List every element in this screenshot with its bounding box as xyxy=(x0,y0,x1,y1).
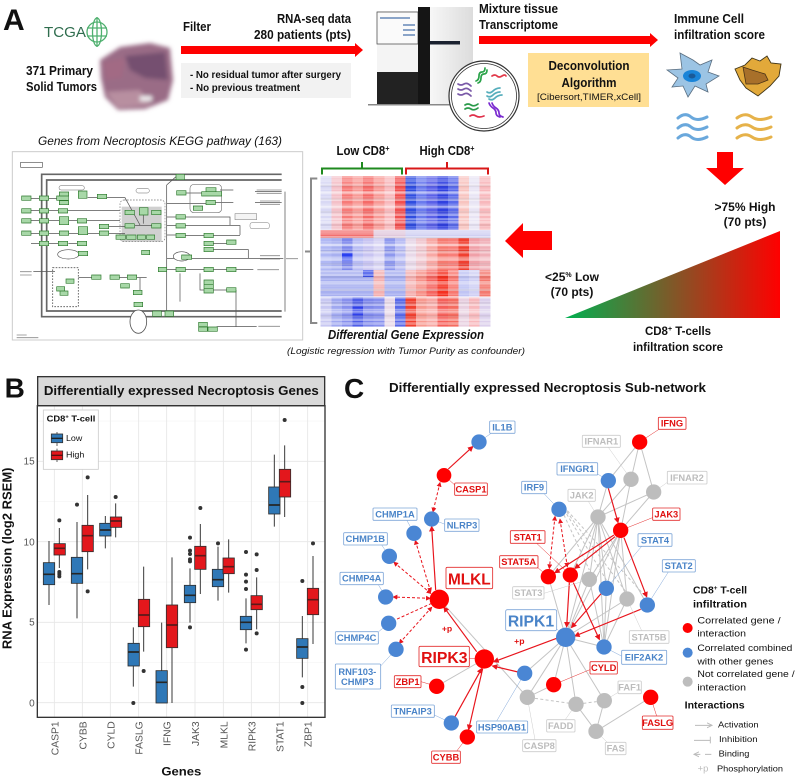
node: CYBB: CYBB xyxy=(433,752,459,762)
x axis gene labels: CASP1 xyxy=(50,721,61,755)
node: STAT4 xyxy=(599,534,672,596)
RNA-seq label: RNA-seq data xyxy=(277,12,352,26)
node: MLKL: MLKL xyxy=(448,572,491,589)
infiltration gradient triangle xyxy=(565,231,780,318)
legend item: correlated: Correlated gene / xyxy=(697,616,781,626)
tumor count label: 371 Primary xyxy=(26,64,93,78)
node: RIPK3: RIPK3 xyxy=(421,650,467,667)
legend: CD8 T-cell: + xyxy=(65,415,69,421)
legend heading: interactions: Interactions xyxy=(685,700,745,711)
phosphorylation labels: +p xyxy=(514,636,525,646)
node: IFNAR2: IFNAR2 xyxy=(670,473,704,483)
tumor count label: Solid Tumors xyxy=(26,80,97,94)
legend item: correlated combined: with other genes xyxy=(696,657,774,667)
node: RNF103-CHMP3: CHMP3 xyxy=(341,677,374,687)
infiltration axis label: CD8 xyxy=(645,326,668,338)
immune cell score label: infiltration score xyxy=(674,28,765,42)
infiltration axis label: infiltration score xyxy=(633,342,723,354)
RNA-seq label xyxy=(254,12,352,42)
node: TNFAIP3: TNFAIP3 xyxy=(393,706,432,716)
icon: transcript mixture circle xyxy=(449,61,519,131)
arrow: filter to sequencer xyxy=(181,43,363,57)
legend item: correlated xyxy=(683,616,781,639)
low CD8 heading: Low CD8 xyxy=(336,144,390,158)
node: CASP8: CASP8 xyxy=(524,741,555,751)
legend item: correlated combined: Correlated combined xyxy=(697,643,792,653)
node: EIF2AK2: EIF2AK2 xyxy=(625,653,663,663)
y axis ticks: 15 xyxy=(24,457,35,468)
node: CASP1 xyxy=(437,468,487,495)
mixture transcriptome label xyxy=(479,2,558,32)
legend item: not correlated xyxy=(683,669,795,692)
node: IL1B xyxy=(471,421,515,450)
y axis ticks: 0 xyxy=(29,698,35,709)
node: CHMP1A: CHMP1A xyxy=(375,509,415,519)
node: FAF1 xyxy=(597,681,641,708)
node: CHMP1B: CHMP1B xyxy=(346,534,385,544)
boxes: low CD8 group xyxy=(43,455,308,703)
node: IRF9 xyxy=(522,481,567,517)
node: HSP90AB1 xyxy=(477,666,532,733)
grey edges xyxy=(437,442,654,731)
node: JAK2 xyxy=(568,489,606,525)
node: CHMP1A xyxy=(373,508,422,541)
x axis gene labels: FASLG xyxy=(135,721,146,755)
legend heading: infiltration: CD8 xyxy=(693,585,714,596)
node: FAS xyxy=(588,724,626,755)
panel letter C: C xyxy=(344,373,364,404)
legend: network xyxy=(683,585,795,774)
x axis gene labels xyxy=(50,721,315,755)
node: STAT2: STAT2 xyxy=(665,561,693,571)
icon: sequencer xyxy=(368,7,474,106)
node: STAT3 xyxy=(513,572,597,599)
legend: CD8 T-cell: High xyxy=(66,450,85,460)
legend heading: infiltration: T-cell xyxy=(718,585,747,596)
immune cell score label: Immune Cell xyxy=(674,12,744,26)
node: CYBB xyxy=(432,729,475,763)
panel letter B: B xyxy=(5,372,25,403)
tumor tissue image xyxy=(100,43,173,110)
legend heading: infiltration: + xyxy=(714,585,718,592)
KEGG heading: Genes from Necroptosis KEGG pathway (163) xyxy=(38,134,282,148)
node: RIPK3 xyxy=(419,646,494,669)
high group label: >75% High xyxy=(714,200,776,214)
icon: blue immune cell xyxy=(667,53,719,97)
legend item: correlated: interaction xyxy=(697,629,746,639)
red bracket: high group xyxy=(406,162,488,174)
network title: Differentially expressed Necroptosis Sub-network xyxy=(389,380,707,395)
node: IFNAR1: IFNAR1 xyxy=(584,437,618,447)
node: JAK3 xyxy=(613,508,680,538)
node: RNF103-CHMP3: RNF103- xyxy=(338,667,376,677)
node: STAT5A: STAT5A xyxy=(501,557,536,567)
x axis gene labels: STAT1 xyxy=(275,721,286,752)
x axis gene labels: CYLD xyxy=(106,721,117,749)
panel: A workflow xyxy=(3,2,781,357)
y axis ticks: 10 xyxy=(24,537,35,548)
node: NLRP3 xyxy=(424,511,479,531)
y axis ticks xyxy=(24,457,35,709)
green bracket: low group xyxy=(322,162,402,174)
node: JAK3: JAK3 xyxy=(654,509,678,519)
x axis gene labels: IFNG xyxy=(163,721,174,746)
deconvolution algorithm box: Deconvolution xyxy=(548,59,630,73)
icon: gold waves xyxy=(737,115,771,140)
node: IRF9: IRF9 xyxy=(524,483,544,493)
low group label: % xyxy=(565,272,572,279)
panel letter A: A xyxy=(3,4,25,37)
filter criteria box: - No previous treatment xyxy=(190,83,301,94)
high CD8 heading: + xyxy=(470,144,475,153)
filter label: Filter xyxy=(183,20,211,34)
plot frame xyxy=(37,406,325,717)
node: CASP1: CASP1 xyxy=(455,484,487,494)
heatmap caption xyxy=(287,328,525,357)
legend: CD8 T-cell: T-cell xyxy=(69,414,95,424)
infiltration axis label: T-cells xyxy=(672,326,711,338)
node: HSP90AB1: HSP90AB1 xyxy=(478,722,526,732)
node: IFNG xyxy=(632,417,686,450)
plot area xyxy=(37,406,325,717)
legend item: binding: Binding xyxy=(719,749,750,759)
node: STAT1 xyxy=(510,531,578,583)
node: RNF103-CHMP3 xyxy=(335,642,404,689)
x axis gene labels: RIPK3 xyxy=(247,721,258,751)
legend item: binding xyxy=(694,749,750,759)
x axis gene labels: JAK3 xyxy=(191,721,202,746)
bracket: KEGG to heatmap xyxy=(305,178,317,323)
legend item: inhibition xyxy=(694,734,758,744)
node: CYLD: CYLD xyxy=(591,663,617,673)
mixture transcriptome label: Transcriptome xyxy=(479,18,558,32)
red dashed binding edges xyxy=(393,483,567,643)
node: CHMP4A: CHMP4A xyxy=(342,574,382,584)
node: IL1B: IL1B xyxy=(492,423,513,433)
node: STAT5B xyxy=(619,591,669,643)
legend: CD8 T-cell xyxy=(43,410,98,469)
legend heading: infiltration: infiltration xyxy=(693,600,747,611)
legend item: phosphorylation: Phosphorylation xyxy=(717,763,783,773)
arrow: score to heatmap xyxy=(505,223,552,258)
node: STAT5B: STAT5B xyxy=(632,632,667,642)
node: RIPK1: RIPK1 xyxy=(508,614,555,631)
heatmap xyxy=(321,176,490,327)
legend item: inhibition: Inhibition xyxy=(719,734,758,744)
tumor count label xyxy=(26,64,97,94)
infiltration axis label: + xyxy=(668,326,672,333)
node: STAT5A xyxy=(500,556,556,584)
boxes: high CD8 group xyxy=(54,445,319,703)
node: NLRP3: NLRP3 xyxy=(447,520,477,530)
low group label: <25 xyxy=(545,270,565,284)
node: STAT1: STAT1 xyxy=(514,532,542,542)
node: CHMP4A xyxy=(340,572,393,605)
infiltration axis label xyxy=(633,326,723,354)
low group label xyxy=(545,270,600,299)
node: IFNG: IFNG xyxy=(661,419,683,429)
immune cell score label xyxy=(674,12,765,42)
TCGA logo: TCGA xyxy=(44,24,86,41)
low group label: (70 pts) xyxy=(551,285,593,299)
node: STAT3: STAT3 xyxy=(514,588,542,598)
node: FAF1: FAF1 xyxy=(618,683,641,693)
deconvolution algorithm box: [Cibersort,TIMER,xCell] xyxy=(537,92,641,103)
legend: CD8 T-cell: CD8 xyxy=(47,414,64,424)
node: CHMP1B xyxy=(344,533,397,564)
red arrows xyxy=(432,447,647,729)
node: STAT2 xyxy=(640,560,695,613)
node: CHMP4C: CHMP4C xyxy=(337,633,377,643)
x axis gene labels: MLKL xyxy=(219,721,230,748)
node: ZBP1 xyxy=(394,676,444,694)
node: CASP8 xyxy=(520,690,556,752)
icon: gold immune cell xyxy=(735,56,781,96)
mixture transcriptome label: Mixture tissue xyxy=(479,2,558,16)
plot header xyxy=(38,377,325,406)
node: JAK2: JAK2 xyxy=(570,491,594,501)
RNA-seq label: 280 patients (pts) xyxy=(254,28,351,42)
legend item: activation xyxy=(695,720,759,730)
legend heading: infiltration xyxy=(693,585,747,611)
node: FAS: FAS xyxy=(607,744,625,754)
deconvolution algorithm box: Algorithm xyxy=(562,76,616,90)
outliers xyxy=(57,418,315,705)
node: FASLG: FASLG xyxy=(642,718,673,728)
node: IFNAR1 xyxy=(582,435,639,487)
x axis gene labels: CYBB xyxy=(78,721,89,749)
node: CHMP4C xyxy=(335,616,396,644)
node: FADD xyxy=(547,697,584,732)
KEGG pathway diagram xyxy=(12,152,303,340)
phosphorylation labels xyxy=(442,623,525,646)
high CD8 heading: High CD8 xyxy=(420,144,476,158)
heatmap caption: Differential Gene Expression xyxy=(328,328,484,342)
node: IFNGR1 xyxy=(557,463,616,488)
high group label: (70 pts) xyxy=(724,215,766,229)
node: FASLG xyxy=(642,690,673,729)
legend item: not correlated: Not correlated gene / xyxy=(697,669,795,679)
phosphorylation labels: +p xyxy=(442,623,452,633)
arrow: transcriptome to immune score xyxy=(479,33,658,47)
node: ZBP1: ZBP1 xyxy=(396,677,420,687)
legend: CD8 T-cell: Low xyxy=(66,433,83,443)
panel: C network xyxy=(335,417,795,774)
y axis ticks: 5 xyxy=(29,618,35,629)
legend item: activation: Activation xyxy=(718,720,759,730)
node: IFNGR1: IFNGR1 xyxy=(560,464,594,474)
filter criteria box: - No residual tumor after surgery xyxy=(190,70,341,81)
node: RIPK1 xyxy=(506,610,575,647)
grey dashed edges xyxy=(535,511,647,703)
TCGA logo xyxy=(44,17,107,47)
node: TNFAIP3 xyxy=(391,705,459,731)
plot header: Differentially expressed Necroptosis Genes xyxy=(44,384,319,398)
node: IFNAR2 xyxy=(646,471,707,500)
node: FADD: FADD xyxy=(548,721,574,731)
node: EIF2AK2 xyxy=(596,639,667,664)
node: CYLD xyxy=(546,662,617,692)
arrow: down to score triangle xyxy=(706,152,744,185)
panel: B boxplot xyxy=(0,372,325,777)
heatmap caption: (Logistic regression with Tumor Purity as confounder) xyxy=(287,346,525,357)
low CD8 heading: + xyxy=(385,144,390,153)
node: STAT4: STAT4 xyxy=(641,535,670,545)
legend item: phosphorylation: +p xyxy=(698,764,708,774)
filter criteria box xyxy=(181,63,351,98)
legend item: not correlated: interaction xyxy=(697,682,746,692)
deconvolution algorithm box xyxy=(528,53,649,107)
high group label xyxy=(714,200,776,229)
icon: blue waves xyxy=(678,115,707,140)
legend item: correlated combined xyxy=(683,643,792,667)
x axis gene labels: ZBP1 xyxy=(304,721,315,747)
node: MLKL xyxy=(430,567,493,609)
low group label: Low xyxy=(572,270,600,284)
